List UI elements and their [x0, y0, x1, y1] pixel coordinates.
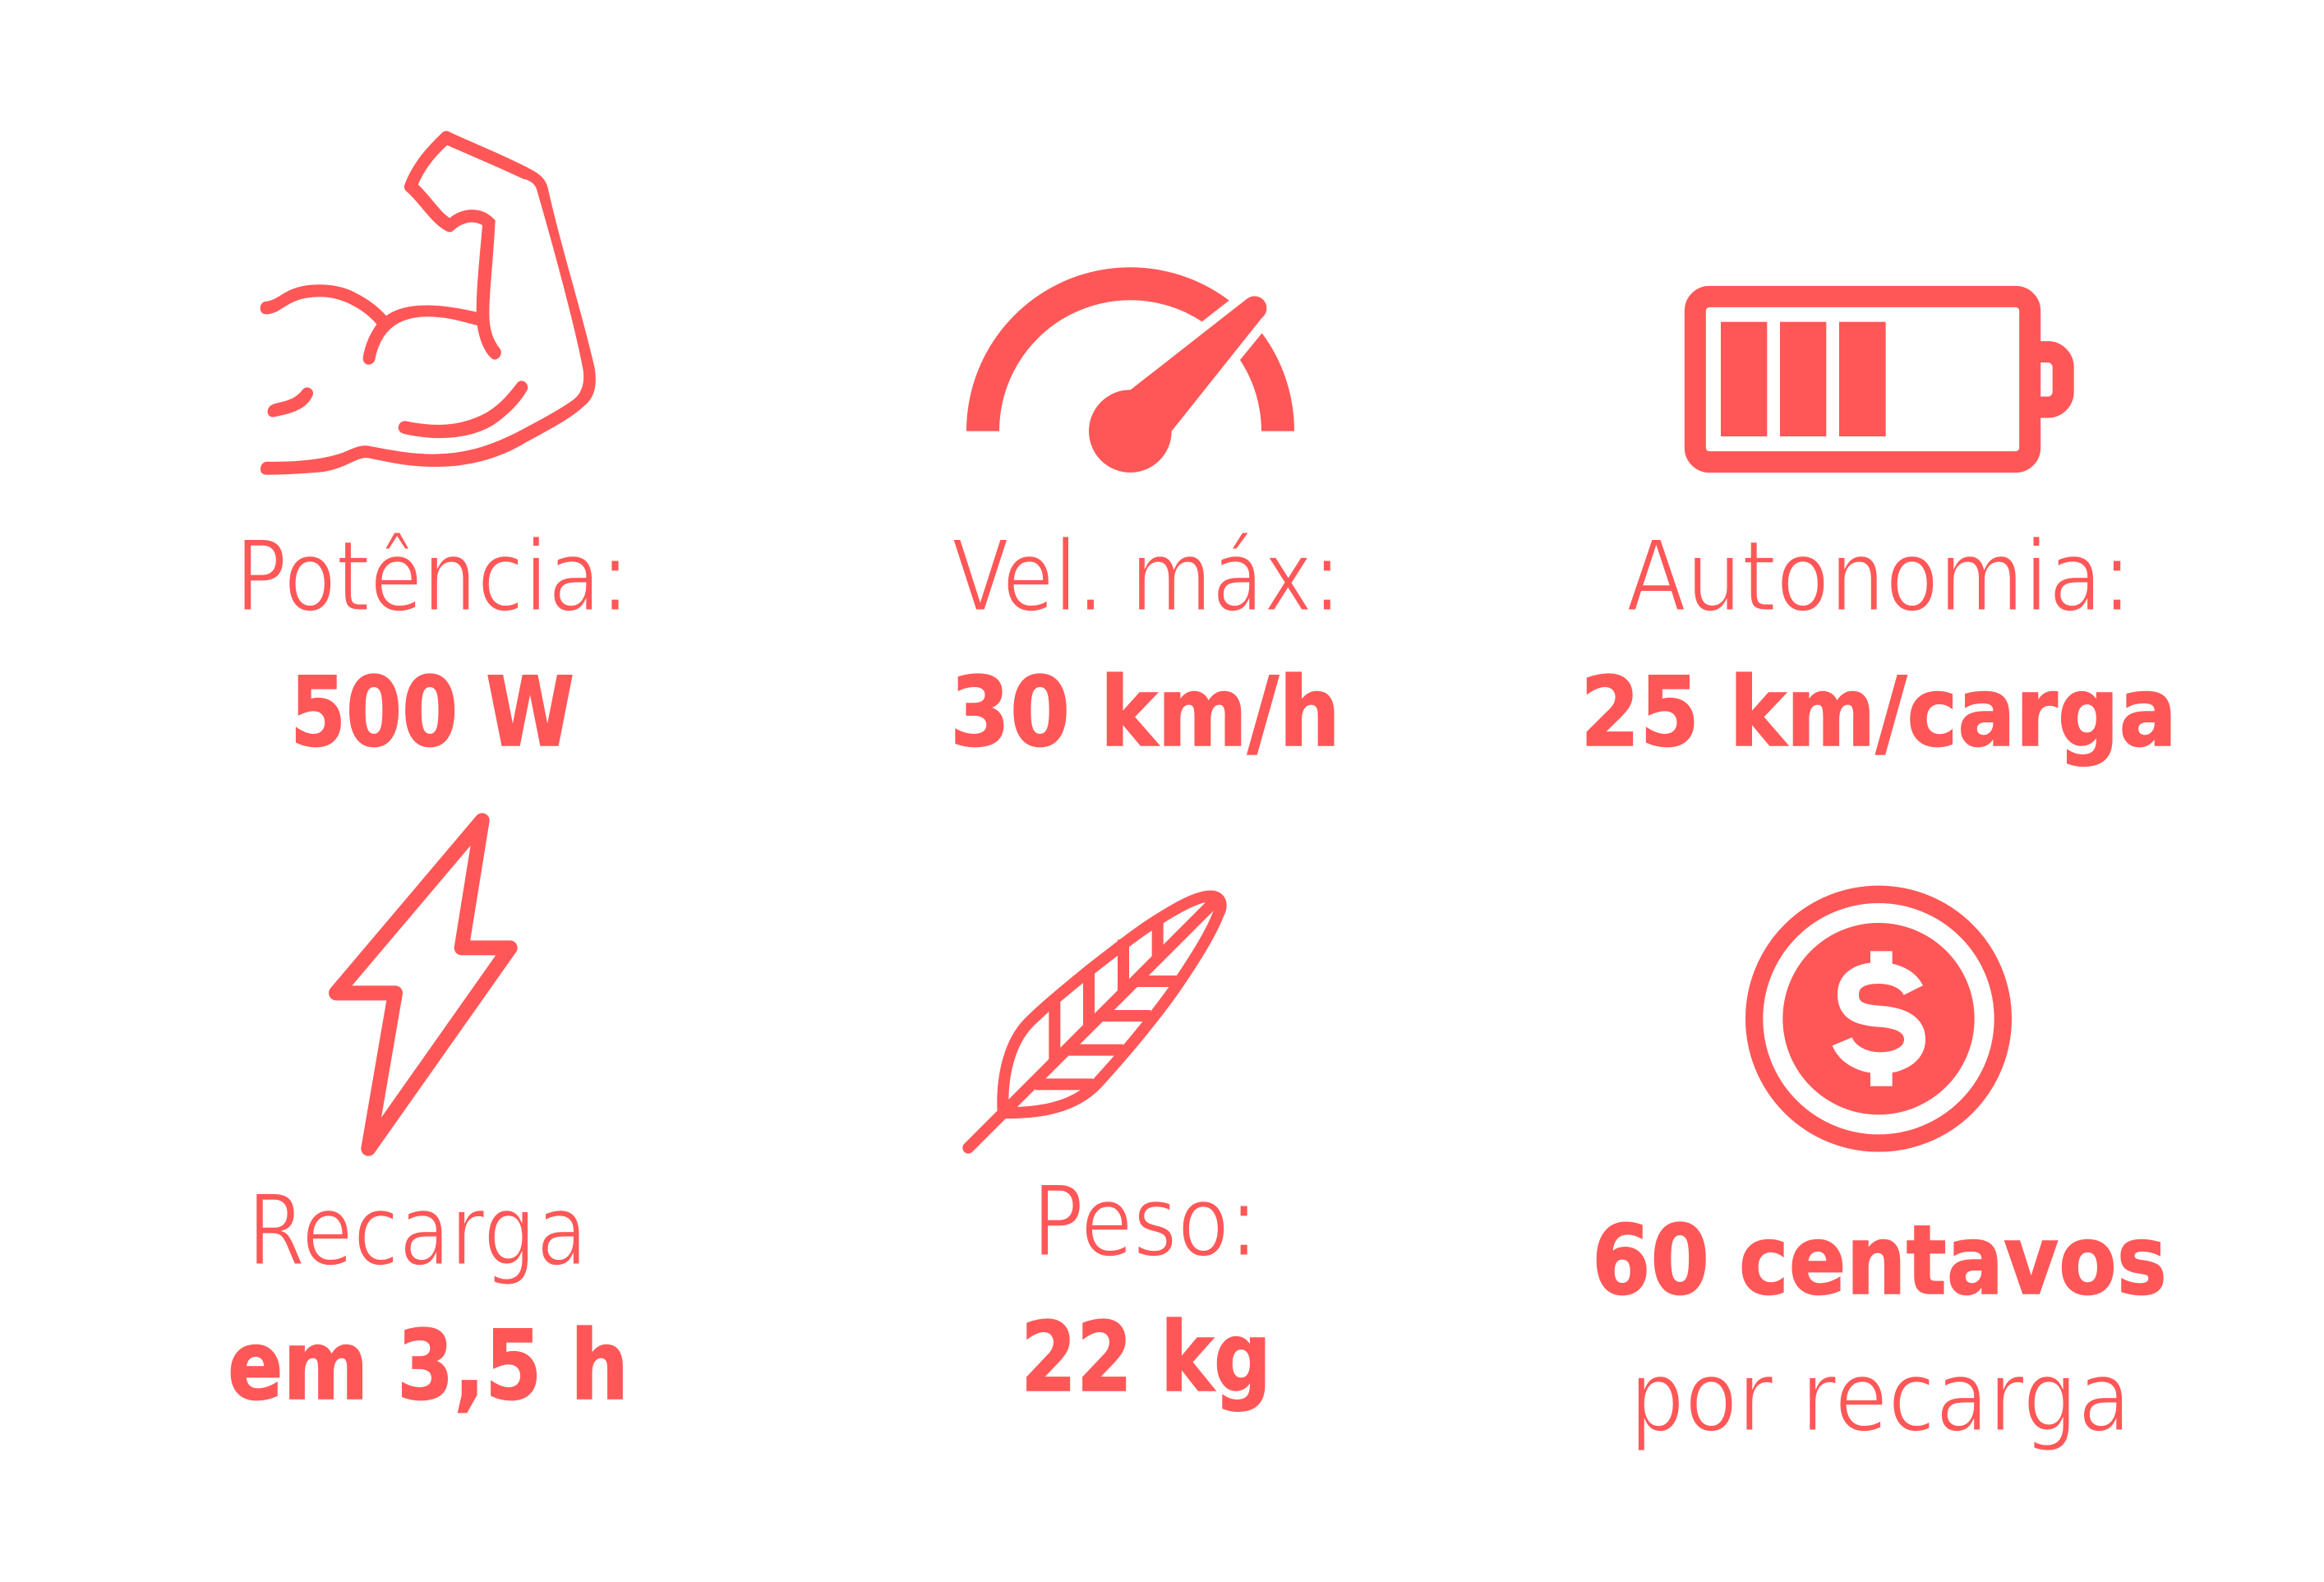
panel: potência	[235, 131, 629, 768]
label: Peso: Peso:	[1032, 1165, 1258, 1280]
value: 25 km/carga: 25 km/carga	[1580, 656, 2177, 768]
value: em 3,5 h: em 3,5 h	[228, 1309, 629, 1422]
icon: flexed arm	[261, 131, 596, 474]
icon: feather	[968, 896, 1221, 1148]
value: 22 kg: 22 kg	[1021, 1301, 1271, 1414]
panel: custo	[1592, 894, 2167, 1455]
label: Autonomia: Autonomia:	[1626, 520, 2132, 634]
panel: velocidade máxima	[950, 267, 1341, 768]
icon: speedometer	[966, 267, 1294, 473]
label: Vel. máx: Vel. máx:	[952, 520, 1341, 634]
icon: lightning bolt	[336, 820, 510, 1149]
value: 30 km/h: 30 km/h	[950, 656, 1340, 768]
value: 60 centavos: 60 centavos	[1592, 1204, 2167, 1317]
panel: autonomia	[1580, 297, 2177, 768]
label: por recarga: por recarga	[1630, 1340, 2131, 1455]
icon: dollar coin	[1755, 894, 2003, 1143]
value: 500 W: 500 W	[290, 656, 574, 768]
label: Recarga: Recarga	[247, 1174, 588, 1289]
label: Potência: Potência:	[235, 520, 629, 634]
icon: battery	[1695, 297, 2063, 462]
panel: peso	[968, 896, 1271, 1414]
panel: recarga	[228, 820, 629, 1422]
